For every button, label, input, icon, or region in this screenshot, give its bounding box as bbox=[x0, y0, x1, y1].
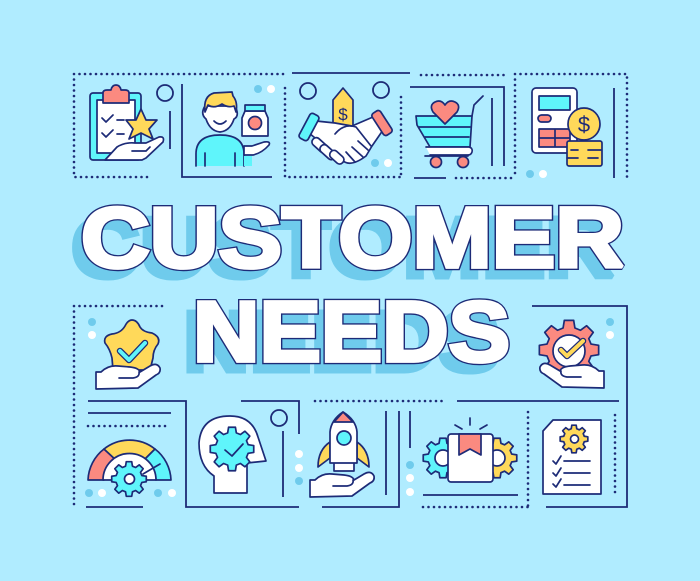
icon: gauge with gear bbox=[88, 440, 171, 496]
title outline: NEEDS bbox=[193, 285, 510, 380]
icon: gear with check on hand bbox=[539, 320, 604, 388]
frame lines bbox=[74, 73, 627, 507]
title outline: CUSTOMER bbox=[81, 191, 624, 286]
title shadow: CUSTOMER bbox=[71, 201, 614, 296]
title: NEEDS bbox=[193, 285, 510, 380]
title outline bbox=[81, 191, 624, 380]
decorative circles and dots bbox=[85, 82, 614, 497]
icon: rocket on hand bbox=[310, 412, 374, 497]
icon: calculator and coins bbox=[532, 88, 602, 166]
title shadow bbox=[71, 201, 614, 390]
icon: handshake with price tag: $ bbox=[338, 105, 348, 124]
icon: star on hand bbox=[96, 320, 160, 389]
icon: shopping cart with heart bbox=[416, 96, 483, 168]
icon: clipboard with star bbox=[90, 85, 164, 160]
icon: document with gear and checklist bbox=[543, 420, 601, 494]
icon: handshake with price tag bbox=[298, 88, 393, 166]
icon: person with product jar bbox=[196, 92, 269, 166]
icon: box with gears bbox=[423, 418, 517, 482]
title: CUSTOMER bbox=[81, 191, 624, 286]
icon: head with gear bbox=[199, 416, 266, 493]
icon: calculator and coins: $ bbox=[578, 112, 590, 137]
title bbox=[81, 191, 624, 380]
title shadow: NEEDS bbox=[183, 295, 500, 390]
